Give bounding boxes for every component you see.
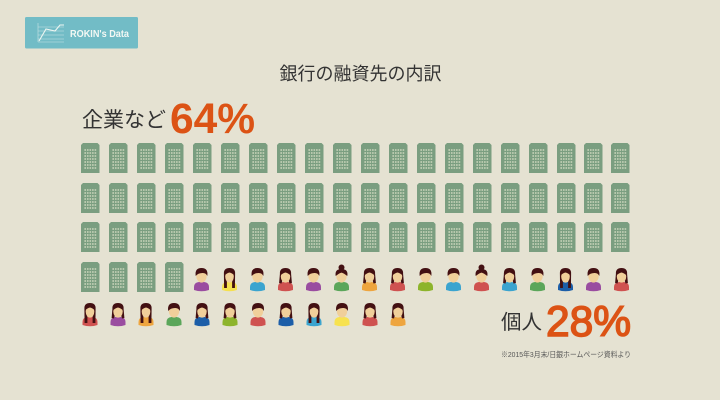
source note: ※2015年3月末/日銀ホームページ資料より [501,350,631,359]
icon: line chart [38,23,64,42]
heading: companies 64%: 企業など [82,109,166,132]
heading: individuals 28% [501,299,631,346]
logo badge: ROKIN's Data [25,17,138,48]
logo text: ROKIN's Data [70,29,129,40]
heading: individuals 28%: 28% [546,299,631,346]
title: 銀行の融資先の内訳 [280,64,442,84]
heading: companies 64% [82,96,255,143]
person icons: individuals 28% [82,264,629,326]
building icons: companies 64% [81,143,630,292]
heading: companies 64%: 64% [170,96,255,143]
heading: individuals 28%: 個人 [501,311,542,334]
